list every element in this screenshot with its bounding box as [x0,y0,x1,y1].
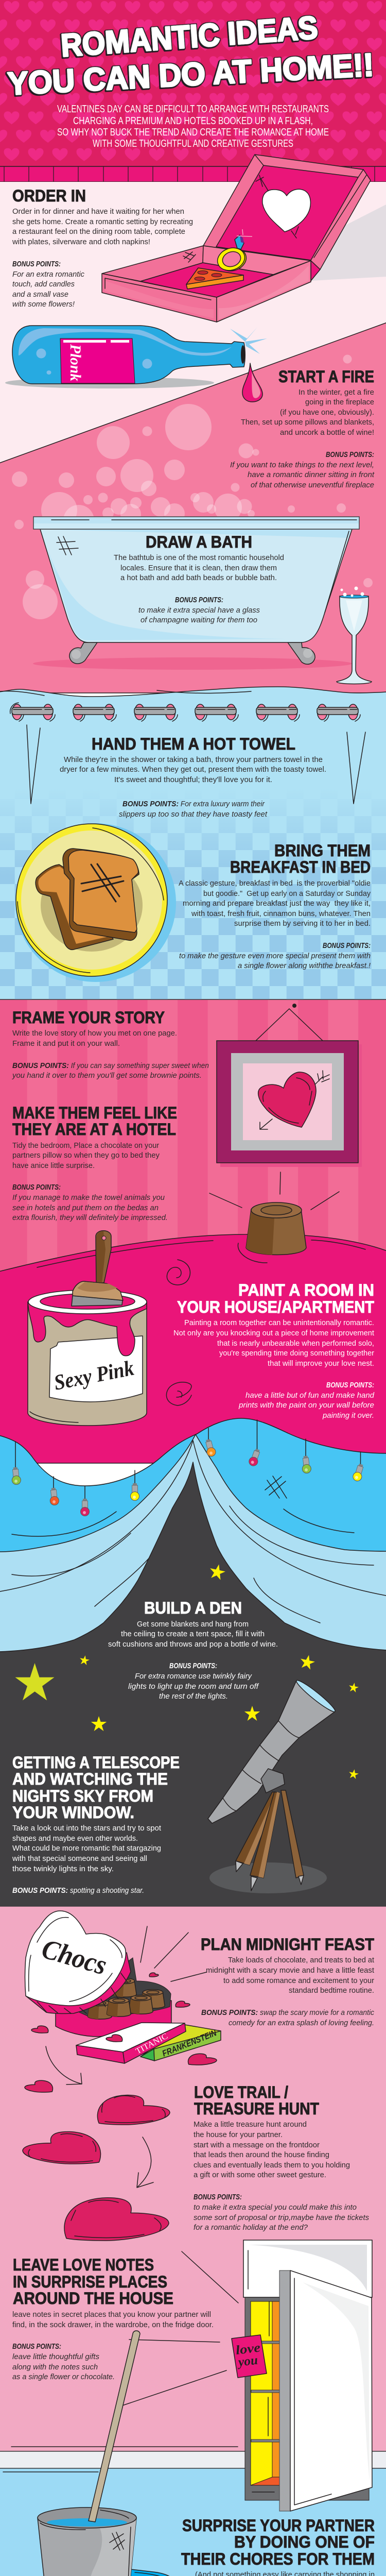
panel: build a den [0,1418,386,1906]
icon: wine drop [242,363,262,402]
text: love trail bonus: for a romantic holiday at the end? [194,2223,308,2232]
text: order in bonus [12,260,84,309]
text: love notes body: leave notes in secret places that you know your partner will [12,2310,211,2319]
icon: heart with arrow [258,1071,329,1129]
text: frame body: Frame it and put it on your wall. [12,1039,120,1048]
heading: hotel [12,1104,177,1139]
text: feast body: standard bedtime routine. [289,1986,374,1995]
text: feast body [206,1956,375,1995]
text: bath bonus: BONUS POINTS: [175,596,223,604]
text: start a fire body: Then, set up some pillows and blankets, [241,418,374,427]
heading: hotel: THEY ARE AT A HOTEL [12,1120,176,1139]
text: bath bonus: of champagne waiting for them too [141,616,257,624]
text: bath body: a hot bath and add bath beads or bubble bath. [120,573,277,582]
text: paint body: Painting a room together can be unintentionally romantic. [184,1318,374,1327]
text: bath body [114,553,284,582]
text: feast body: Take loads of chocolate, and treats to bed at [228,1956,375,1964]
icon: note rays [11,2251,238,2447]
text: paint bonus: have a little but of fun and make hand [245,1391,375,1400]
text: den bonus: For extra romance use twinkly fairy [135,1672,252,1681]
text: feast bonus: comedy for an extra splash of loving feeling. [229,2019,374,2027]
heading: order in: ORDER IN [12,187,86,205]
text: start a fire bonus: have a romantic dinner sitting in front [248,470,375,479]
bottle label: Plonk [67,344,84,381]
intro text: CHARGING A PREMIUM AND HOTELS BOOKED UP IN A FLASH, [73,115,313,127]
text: breakfast body: surprise them by serving it to her in bed. [234,919,371,928]
bottle label [60,338,135,383]
icon: choc rays [141,1926,206,1981]
text: start a fire bonus: BONUS POINTS: [326,450,374,459]
text: hot towel body: It's sweet and thoughtful; they'll love you for it. [114,775,272,784]
text: bath bonus: to make it extra special have a glass [138,606,260,615]
text: love trail bonus: some sort of proposal or trip,maybe have the tickets [194,2213,369,2222]
pink tile strip [0,166,386,182]
text: love trail body: the house for your partner. [194,2130,283,2139]
text: hotel bonus: BONUS POINTS: [12,1183,61,1192]
text: love notes bonus [12,2342,115,2381]
text: order in bonus: For an extra romantic [12,270,84,279]
text: frame body [12,1029,177,1048]
heading: love notes: IN SURPRISE PLACES [13,2273,167,2291]
text: hot towel bonus: BONUS POINTS: For extra luxury warm their [122,800,265,808]
icon: towel spikes [27,725,365,804]
heading: love notes: AROUND THE HOUSE [13,2289,173,2308]
text: hot towel bonus: slippers up too so that they have toasty feet [119,810,268,819]
icon: chocolate box [25,1911,171,2037]
icon: blanket curtain [0,1434,386,1680]
icon: dvd boxes [76,2023,221,2063]
text: paint body: you're spending time doing something together [219,1349,374,1358]
heading: telescope: NIGHTS SKY FROM [12,1787,153,1805]
icon: stars [15,1563,359,1780]
icon: big hearts [23,2095,170,2241]
text: breakfast body [179,879,371,928]
icon: picture frame [217,1004,362,1167]
text: breakfast body: morning and prepare breakfast just the way they like it, [183,899,371,908]
text: bath body: The bathtub is one of the most romantic household [114,553,284,562]
heading: love trail [194,2083,319,2118]
icon: love note [232,2335,267,2378]
icon: spiral [167,1260,190,1285]
text: start a fire body: In the winter, get a fire [299,388,374,397]
bubbles [12,354,373,619]
text: bath bonus [138,596,260,624]
text: hotel bonus: see in hotels and put them on the bedas an [12,1204,159,1212]
text: den body: soft cushions and throws and pop a bottle of wine. [108,1640,278,1649]
panel: paint a room [0,1202,386,1463]
text: love trail body: clues and eventually leads them to you holding [194,2161,350,2170]
text: hot towel body: dryer for a few minutes. When they get out, present them with the toasty towel. [60,765,326,774]
panel: midnight feast and love trail [0,1906,386,2451]
text: start a fire bonus: If you want to take things to the next level, [230,461,374,469]
text: telescope bonus: BONUS POINTS: spotting a shooting star. [12,1886,144,1895]
heading: midnight feast: PLAN MIDNIGHT FEAST [201,1935,374,1954]
heading: chores [181,2516,375,2568]
icon: fairy light bulbs [11,1420,365,1516]
text: breakfast bonus [179,941,371,970]
icon: diamond ring [214,229,252,275]
text: love notes body: find, in the sock drawer, in the wardrobe, on the fridge door. [12,2320,214,2329]
text: den bonus: the rest of the lights. [159,1692,228,1701]
text: hot towel body: While they're in the shower or taking a bath, throw your partners towel in the [64,755,323,764]
text: order in bonus: BONUS POINTS: [12,260,61,268]
icon: heart and arrow on lid [256,175,310,238]
heading: love notes [13,2256,173,2308]
icon: mop and bucket [4,2331,182,2576]
dark tent and night sky [0,1462,386,1906]
panel: start a fire [0,323,386,693]
icon: pizza slice [186,268,243,289]
text: telescope body: those twinkly lights in the sky. [12,1865,114,1873]
text: love trail bonus: BONUS POINTS: [194,2193,242,2201]
icon: small hearts [25,1973,217,2092]
pizza box [102,155,371,322]
icon: wine bottle [5,326,267,388]
heading: paint a room [177,1281,374,1316]
text: paint bonus: prints with the paint on your wall before [238,1401,374,1410]
text: feast bonus [201,2008,374,2027]
text: love trail body: that leads then around the house finding [194,2150,329,2159]
text: paint body: Not only are you knocking out a piece of home improvement [173,1329,375,1337]
text: breakfast bonus: a single flower along withthe breakfast.! [238,961,371,970]
text: start a fire bonus: of that otherwise uneventful fireplace [251,481,374,489]
text: order in body: a restaurant feel on the dining room table, complete [12,227,185,236]
text: telescope body: What could be more romantic that stargazing [12,1844,161,1853]
text: hotel body: Tidy the bedroom, Place a chocolate on your [12,1141,159,1150]
text: love trail bonus [194,2193,369,2232]
heading: breakfast in bed: BRING THEM [274,841,371,860]
icon: towel rods [10,703,360,721]
text: hotel body: have anice little surprise. [12,1161,95,1170]
text: paint bonus: painting it over. [322,1411,374,1420]
text: breakfast body: but goodie." Get up early on a Saturday or Sunday [203,889,371,898]
heading: telescope: YOUR WINDOW. [12,1803,134,1822]
text: hot towel bonus [119,800,268,819]
text: den bonus [128,1662,259,1701]
text: love trail body: a gift or with some other sweet gesture. [194,2171,326,2179]
text: hot towel body [60,755,326,784]
text: order in body: she gets home. Create a romantic setting by recreating [12,217,193,226]
title: YOU CAN DO AT HOME!! [7,47,375,102]
text: hotel bonus: If you manage to make the towel animals you [12,1193,165,1202]
heading: hotel: MAKE THEM FEEL LIKE [12,1104,177,1122]
panel: draw a bath [33,517,372,684]
heading: love trail: LOVE TRAIL / [194,2083,288,2102]
text: hotel bonus [12,1183,168,1222]
icon: paint brush [72,1231,123,1306]
icon: arrows [46,2046,153,2188]
text: den bonus: BONUS POINTS: [169,1662,217,1670]
text: start a fire bonus [230,450,375,489]
panel: order in [0,155,386,470]
text: telescope body: Take a look out into the stars and try to spot [12,1824,162,1833]
text: telescope body: shapes and maybe even other worlds. [12,1834,138,1843]
intro text [57,104,329,149]
text: love trail bonus: to make it extra special you could make this into [194,2203,357,2212]
text: den body [108,1620,278,1649]
icon: dvd boxes: TITANIC [134,2032,169,2056]
intro text: WITH SOME THOUGHTFUL AND CREATIVE GESTURES [93,138,293,149]
heading: hot towel: HAND THEM A HOT TOWEL [92,735,295,753]
text: hotel bonus: extra flourish, they will definitely be impressed. [12,1213,168,1222]
icon: bathtub [33,517,359,664]
text: love trail body [194,2120,350,2179]
text: order in bonus: with some flowers! [12,300,75,309]
text: hotel body [12,1141,160,1170]
text: breakfast bonus: BONUS POINTS: [323,941,371,950]
icon: love note: you [236,2353,259,2369]
text: bath body: locales. Ensure that it is clean, then draw them [120,564,277,572]
text: breakfast body: A classic gesture, breakfast in bed is the proverbial "oldie [179,879,371,888]
text: order in body: with plates, silverware and cloth napkins! [12,238,150,246]
heading: love trail: TREASURE HUNT [194,2099,319,2118]
text: frame body: Write the love story of how you met on one page. [12,1029,177,1038]
text: paint body [173,1318,375,1368]
icon: toast on plate [15,823,176,982]
text: start a fire body: (if you have one, obviously). [280,408,374,417]
text: order in bonus: touch, add candles [12,280,75,289]
heading: chores: BY DOING ONE OF [234,2533,375,2551]
text: breakfast body: with toast, fresh fruit, cinnamon buns, whatever. Then [191,909,371,918]
text: den bonus: lights to light up the room and turn off [128,1682,259,1691]
text: den body: Get some blankets and hang from [137,1620,249,1629]
text: den body: the ceiling to create a tent space, fill it with [121,1630,265,1638]
floor shadow [311,205,386,281]
text: order in bonus: and a small vase [12,290,68,299]
icon: light rays [209,1172,339,1210]
heading: love notes: LEAVE LOVE NOTES [13,2256,154,2274]
panel: hot towel and breakfast [0,687,386,999]
text: frame bonus: BONUS POINTS: If you can say something super sweet when [12,1061,209,1070]
icon: telescope [208,1678,337,1893]
text: start a fire body [241,388,374,437]
text: order in body [12,207,193,246]
title: ROMANTIC IDEAS [60,10,319,64]
panel: frame your story and hotel [0,999,386,1288]
can label [49,1336,143,1402]
text: love trail body: Make a little treasure hunt around [194,2120,307,2129]
icon: fridge [232,2240,372,2511]
text: start a fire body: going in the fireplace [305,398,374,406]
text: paint bonus: BONUS POINTS: [326,1381,374,1389]
heading: telescope: GETTING A TELESCOPE [12,1753,180,1772]
text: love notes bonus: along with the notes such [12,2363,98,2371]
text: love trail body: start with a message on the frontdoor [194,2141,320,2149]
heading: telescope: AND WATCHING THE [12,1770,168,1788]
heading: telescope [12,1753,180,1822]
text: feast body: midnight with a scary movie and have a little feast [206,1966,375,1975]
text: chocs: Chocs [39,1933,110,1981]
heading: draw a bath: DRAW A BATH [146,533,252,551]
heading: frame your story: FRAME YOUR STORY [12,1008,165,1027]
text: love notes body [12,2310,214,2329]
text: breakfast bonus: to make the gesture even more special present them with [179,952,371,960]
icon: paint can [28,1231,147,1426]
text: feast body: to add some romance and excitement to your [223,1976,374,1985]
text: frame bonus: you hand it over to them you'll get some brownie points. [12,1071,202,1080]
heading: breakfast in bed [230,841,371,876]
text: feast bonus: BONUS POINTS: swap the scary movie for a romantic [201,2008,374,2017]
text: telescope body [12,1824,162,1873]
text: paint bonus [238,1381,375,1420]
text: frame bonus [12,1061,209,1080]
text: love notes bonus: BONUS POINTS: [12,2342,61,2351]
icon: dvd boxes: FRANKENSTEIN [161,2028,218,2059]
panel: chores [0,2240,386,2576]
heading: build a den: BUILD A DEN [144,1599,242,1617]
text: paint body: that is nearly unbearable when performed solo, [217,1339,374,1348]
heading: paint a room: PAINT A ROOM IN [238,1281,374,1299]
text: love notes bonus: leave little thoughtful gifts [12,2352,99,2361]
text: hotel body: partners pillow so when they go to bed they [12,1151,160,1160]
text: paint body: that will improve your love nest. [268,1359,374,1368]
icon: spiral lower [166,1382,191,1405]
text: order in body: Order in for dinner and have it waiting for her when [12,207,184,216]
icon: love note: love [235,2341,261,2358]
text: telescope body: with that special someone and seeing all [12,1854,147,1863]
text: start a fire body: and uncork a bottle of wine! [280,428,374,437]
panel: header [0,0,386,182]
title [7,10,375,102]
can label: Sexy Pink [52,1357,136,1395]
icon: chocolate [246,1202,306,1255]
text: love notes bonus: as a single flower or chocolate. [12,2372,115,2381]
icon: champagne glass [337,586,372,684]
